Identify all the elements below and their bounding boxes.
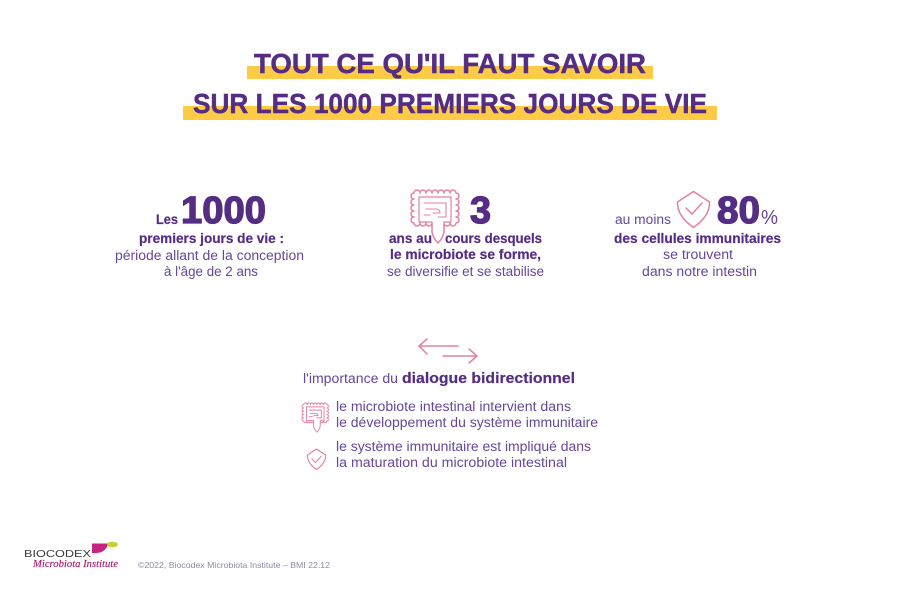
icon: small intestine <box>302 403 328 432</box>
logo pink shape <box>92 544 108 553</box>
text: ans au: ans au <box>389 231 432 246</box>
heading: dialogue: dialogue bidirectionnel <box>402 370 575 387</box>
title line 2: SUR LES 1000 PREMIERS JOURS DE VIE <box>193 88 707 119</box>
logo green shape <box>107 542 118 547</box>
label: Les: Les <box>156 212 178 227</box>
text: microbiota forms: le microbiote se forme, <box>390 247 541 262</box>
icon: small shield <box>307 449 326 470</box>
number: 3: 3 <box>470 190 491 232</box>
percent sign: % <box>761 207 778 229</box>
text: immune system involved: le système immunitaire est impliqué dans <box>336 439 591 454</box>
text: immune development: le développement du système immunitaire <box>336 415 598 430</box>
panel: 1000 days <box>115 190 304 279</box>
footer copyright: ©2022, Biocodex Microbiota Institute – BMI 22.12 <box>138 560 330 570</box>
number: 1000: 1000 <box>181 190 266 232</box>
text: period description: période allant de la conception <box>115 248 304 263</box>
panel: 3 years <box>387 190 544 279</box>
logo script: Microbiota Institute <box>32 559 118 570</box>
logo wordmark: BIOCODEX <box>24 548 91 560</box>
arrow: bidirectional <box>419 339 477 363</box>
icon: intestine <box>411 190 459 243</box>
title highlight line 2 <box>183 106 717 120</box>
text: dans notre intestin: dans notre intestin <box>642 264 757 279</box>
icon: shield <box>677 192 710 228</box>
title <box>183 48 717 120</box>
number: 80: 80 <box>717 190 760 232</box>
text: immune cells: des cellules immunitaires <box>614 231 781 246</box>
title highlight line 1 <box>247 66 653 79</box>
panel: 80 percent <box>614 190 781 279</box>
text: cours desquels: cours desquels <box>445 231 542 246</box>
text: diversifies and stabilises: se diversifie et se stabilise <box>387 264 544 279</box>
text: first thousand days: premiers jours de vie : <box>139 231 284 246</box>
panel: bidirectional dialogue <box>302 339 598 470</box>
text: se trouvent: se trouvent <box>663 247 733 262</box>
text: microbiota intervenes: le microbiote intestinal intervient dans <box>336 399 571 414</box>
title line 1: TOUT CE QU'IL FAUT SAVOIR <box>254 48 646 79</box>
text: age two: à l'âge de 2 ans <box>164 264 258 279</box>
logo: Biocodex Microbiota Institute <box>24 542 118 570</box>
heading: importance: l'importance du <box>303 371 398 386</box>
text: au moins: au moins <box>615 212 671 227</box>
text: microbiota maturation: la maturation du microbiote intestinal <box>336 455 567 470</box>
